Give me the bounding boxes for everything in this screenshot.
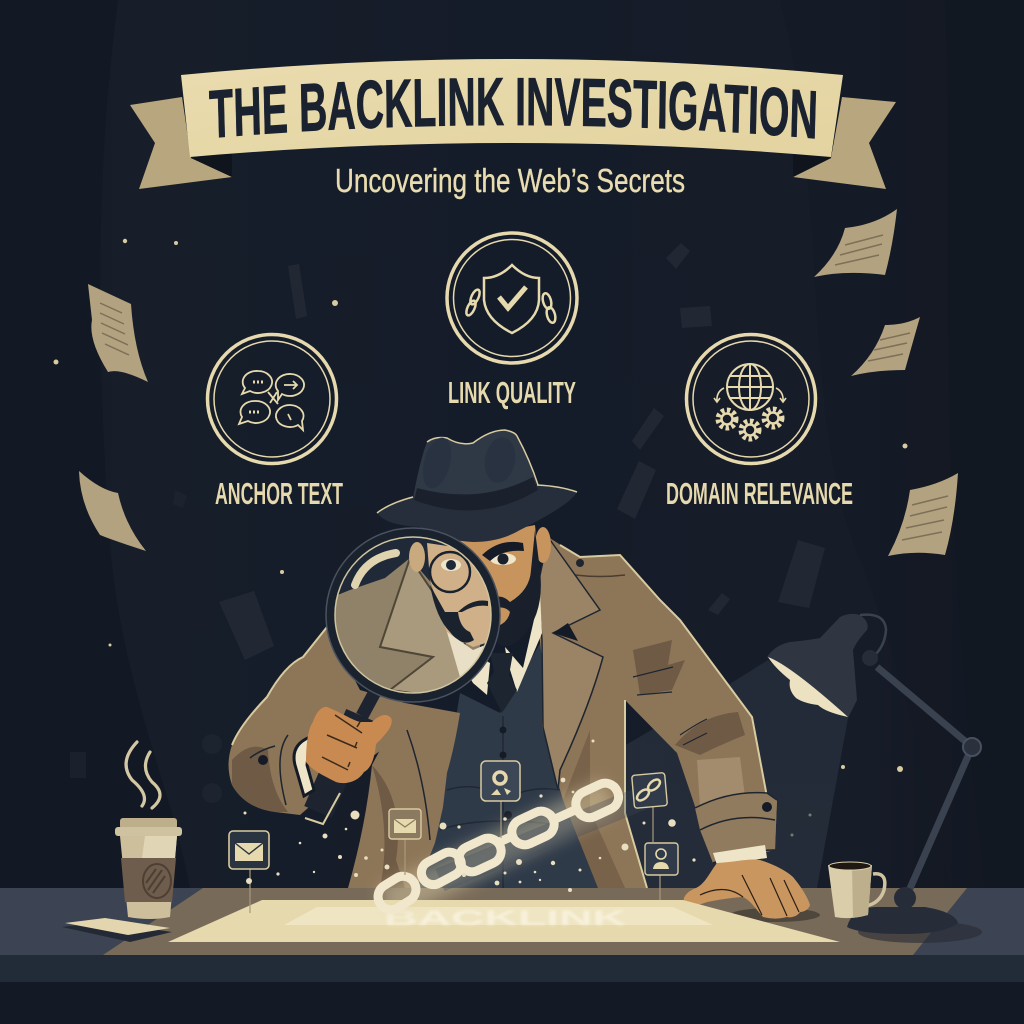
- subtitle: Uncovering the Web’s Secrets: [335, 162, 685, 199]
- fedora hat: [377, 430, 577, 542]
- lamp base: [847, 907, 958, 934]
- ear: [535, 527, 551, 563]
- desk lit area: [103, 888, 967, 955]
- label: link quality: LINK QUALITY: [448, 375, 576, 410]
- flying document: lower right: [888, 473, 958, 556]
- note card: [62, 918, 172, 942]
- chin patch: [497, 608, 510, 626]
- flying document: top left: [88, 284, 148, 382]
- cup body: [120, 836, 177, 919]
- magnified face: [427, 543, 495, 647]
- hand shadow on desk: [730, 908, 820, 922]
- right shirt cuff: [713, 845, 767, 865]
- hat band: [414, 477, 538, 510]
- detective figure: [228, 430, 820, 922]
- tile: envelope middle: [389, 809, 421, 875]
- cup sleeve: [121, 858, 176, 902]
- icon: speech bubbles: [239, 371, 304, 430]
- magnifying glass handle: [305, 690, 376, 824]
- lamp base shadow: [858, 921, 982, 943]
- lamp light beam: [600, 660, 848, 888]
- badge: domain relevance: [686, 334, 816, 464]
- beard: [494, 530, 541, 646]
- face: [460, 525, 540, 640]
- coat left panel: [348, 703, 460, 888]
- banner left tail: [130, 97, 232, 189]
- coffee cup: [115, 742, 182, 919]
- background dust dots: [54, 239, 908, 837]
- right eye and brow: [482, 542, 524, 565]
- shoulder epaulette: [575, 559, 625, 576]
- word on paper: BACKLINK: [384, 907, 626, 930]
- icon: cycle arrows: [714, 388, 786, 402]
- lamp arms: [877, 667, 972, 893]
- paper on desk: [168, 900, 840, 942]
- coat left sleeve: [228, 627, 405, 815]
- shirt cuff left: [294, 737, 314, 796]
- icon: gears: [718, 409, 782, 439]
- flying document: bottom left: [79, 471, 146, 551]
- magnified lapel: [380, 558, 465, 700]
- title banner: [130, 59, 896, 189]
- sparkle particles: [244, 740, 696, 892]
- chain glow: [385, 795, 610, 905]
- magnified glasses and eye: [430, 552, 470, 592]
- tile: person: [645, 843, 678, 900]
- head: [460, 525, 551, 646]
- desk: [0, 888, 1024, 1024]
- badge: link quality: [447, 233, 577, 363]
- magnified beard: [430, 585, 488, 643]
- badge: anchor text: [208, 334, 336, 464]
- coat right side and sleeve: [535, 537, 777, 888]
- coffee mug: [828, 862, 885, 918]
- flying document: top right: [814, 209, 897, 277]
- hat crown: [413, 430, 538, 507]
- vest: [417, 640, 598, 888]
- cup steam: [126, 742, 160, 808]
- faint floating paper fragments: [70, 243, 825, 803]
- icon: broken chain left: [464, 288, 482, 317]
- coat lapel: [538, 537, 603, 790]
- glowing chain: [373, 779, 623, 915]
- icon: shield with check: [484, 265, 539, 333]
- tile: target gear: [481, 761, 520, 838]
- coat sleeve folds: [633, 640, 745, 807]
- magnified shoulder: [336, 559, 480, 689]
- lamp shade: [767, 614, 868, 718]
- lamp bulb light: [768, 657, 848, 717]
- tile: envelope left: [229, 831, 269, 913]
- desk top surface: [0, 888, 1024, 955]
- title: THE BACKLINK INVESTIGATION: [208, 78, 816, 139]
- icon: globe: [727, 364, 773, 410]
- necktie: [487, 653, 517, 713]
- lamp: [767, 614, 982, 943]
- magnifying glass: [325, 527, 501, 703]
- hat brim: [377, 485, 577, 542]
- banner right tail: [793, 97, 896, 189]
- icon: chain right: [541, 292, 557, 324]
- shirt collar: [449, 593, 542, 695]
- desk front edge: [0, 955, 1024, 982]
- dark mist behind chain: [440, 795, 650, 880]
- lamp elbow joint: [963, 738, 981, 756]
- flying document: middle right: [851, 317, 920, 376]
- label: domain relevance: DOMAIN RELEVANCE: [666, 476, 853, 511]
- lens glare: [355, 553, 396, 585]
- coat cuff: [695, 793, 777, 863]
- banner main ribbon: [181, 59, 843, 157]
- lens contents: [336, 538, 490, 692]
- tile: chain link: [632, 773, 667, 842]
- cup lid: [115, 818, 182, 836]
- banner fold shadows: [191, 150, 831, 177]
- label: anchor text: ANCHOR TEXT: [215, 476, 343, 511]
- coat outer highlight: [560, 545, 767, 888]
- right hand on desk: [684, 859, 810, 919]
- hand holding magnifier: [306, 707, 392, 783]
- magnified shirt: [447, 632, 484, 676]
